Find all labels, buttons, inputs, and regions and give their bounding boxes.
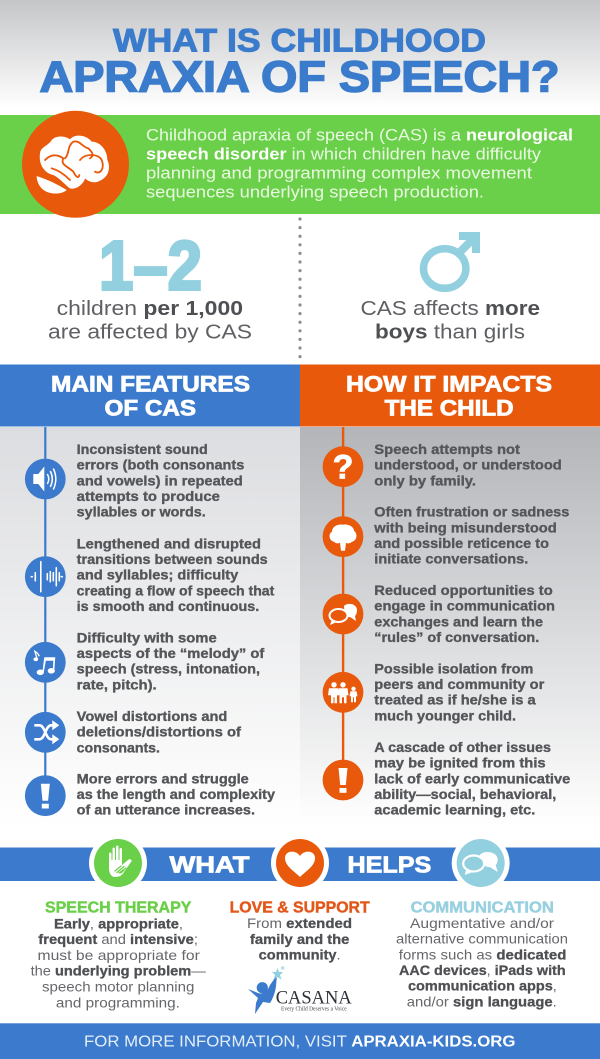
feature text 3: speech (stress, intonation, xyxy=(77,661,260,677)
column: communication xyxy=(396,899,568,1010)
icon: helping hands xyxy=(94,839,142,887)
stat: 1-2 children per 1,000: children per 1,000 xyxy=(57,298,243,320)
icon: question mark xyxy=(323,446,363,487)
title: APRAXIA OF SPEECH? xyxy=(40,54,560,102)
column: speech therapy xyxy=(31,899,206,1010)
impact text 2: Often frustration or sadness xyxy=(374,504,570,520)
panel: how it impacts the child xyxy=(300,364,600,827)
banner text: WHAT xyxy=(170,852,250,878)
logo: CASANA: Every Child Deserves a Voice xyxy=(281,1006,347,1013)
feature text 5: of an utterance increases. xyxy=(77,802,255,818)
feature text 3: aspects of the “melody” of xyxy=(77,645,265,661)
icon: heart xyxy=(276,839,324,887)
feature text 2: Lengthened and disrupted xyxy=(77,535,261,551)
feature text 4 xyxy=(77,708,241,755)
column: communication: AAC devices, iPads with xyxy=(399,962,566,978)
column: speech therapy: frequent and intensive; xyxy=(38,931,198,947)
icon: family group xyxy=(323,672,363,713)
feature text 2: is smooth and continuous. xyxy=(77,598,259,614)
impact text 3: Reduced opportunities to xyxy=(374,582,553,598)
banner text: HELPS xyxy=(348,852,431,878)
impact text 3: exchanges and learn the xyxy=(374,613,543,629)
feature text 1: syllables or words. xyxy=(77,504,206,520)
impact text 2: initiate conversations. xyxy=(374,551,528,567)
column: communication: communication apps , xyxy=(408,978,557,994)
icon: speech bubbles xyxy=(323,594,363,634)
impact text 5: academic learning, etc. xyxy=(374,802,535,818)
icon: question mark: ? xyxy=(333,449,353,487)
feature text 1 xyxy=(77,441,245,520)
column: communication: alternative communication xyxy=(396,931,568,947)
divider: dotted line xyxy=(298,219,302,360)
icon: brain xyxy=(22,111,129,218)
feature text 5: More errors and struggle xyxy=(77,770,249,786)
impact text 2: and possible reticence to xyxy=(374,535,549,551)
icon: exclamation mark xyxy=(323,760,363,800)
definition text: Childhood apraxia of speech (CAS) is a neurological xyxy=(146,127,573,145)
feature text 3: rate, pitch). xyxy=(77,676,157,692)
column: communication: COMMUNICATION xyxy=(411,899,554,916)
impact text 5: ability—social, behavioral, xyxy=(374,786,556,802)
impact text 4: much younger child. xyxy=(374,708,516,724)
title xyxy=(40,23,560,102)
heading: how it impacts: THE CHILD xyxy=(385,396,514,421)
timeline line xyxy=(342,427,344,767)
heading: how it impacts xyxy=(300,364,600,426)
impact text 1: Speech attempts not xyxy=(374,441,520,457)
feature text 2: creating a flow of speech that xyxy=(77,582,275,598)
column: speech therapy: speech motor planning xyxy=(42,978,194,994)
column: love and support: community. xyxy=(259,946,341,962)
column: speech therapy: the underlying problem — xyxy=(31,962,206,978)
column: love and support: From extended xyxy=(247,915,352,931)
feature text 3 xyxy=(77,629,265,692)
panel: definition xyxy=(0,111,600,218)
impact text 1: only by family. xyxy=(374,472,476,488)
column: communication: Augmentative and/or xyxy=(410,915,554,931)
impact text 3 xyxy=(374,582,555,645)
heading: main features: OF CAS xyxy=(104,396,196,421)
column: speech therapy: SPEECH THERAPY xyxy=(45,899,192,916)
feature text 2 xyxy=(77,535,275,614)
title: WHAT IS CHILDHOOD xyxy=(113,23,486,59)
column: love and support: family and the xyxy=(250,931,350,947)
panel: main features of CAS xyxy=(0,364,300,827)
definition text: speech disorder in which children have difficulty xyxy=(146,146,542,164)
icon: tree-shaped head xyxy=(323,516,363,557)
impact text 1: understood, or understood xyxy=(374,457,562,473)
stat: more boys than girls: CAS affects more xyxy=(360,298,540,320)
logo: CASANA xyxy=(248,966,352,1014)
icon: speech bubbles xyxy=(457,839,505,887)
footer xyxy=(0,1023,600,1059)
impact text 2: with being misunderstood xyxy=(373,519,557,535)
icon: music notes xyxy=(25,642,66,683)
impact text 2 xyxy=(373,504,570,567)
feature text 1: Inconsistent sound xyxy=(77,441,208,457)
heading: main features xyxy=(0,364,300,426)
stat: more boys than girls xyxy=(360,232,540,344)
impact text 5 xyxy=(374,739,571,818)
logo: CASANA: CASANA xyxy=(276,988,352,1008)
feature text 3: Difficulty with some xyxy=(77,629,217,645)
column: communication: and/or sign language . xyxy=(407,994,557,1010)
feature text 5 xyxy=(77,770,275,818)
feature text 2: transitions between sounds xyxy=(77,551,268,567)
column: communication: forms such as dedicated xyxy=(399,946,566,962)
icon: child reaching for star xyxy=(248,975,277,1014)
feature text 1: attempts to produce xyxy=(77,488,220,504)
heading: main features: MAIN FEATURES xyxy=(51,372,250,397)
banner text xyxy=(170,852,431,878)
impact text 3: “rules” of conversation. xyxy=(374,629,539,645)
banner: what helps xyxy=(0,834,600,892)
feature text 5: as the length and complexity xyxy=(77,786,275,802)
stat: 1-2 children per 1,000 xyxy=(48,226,252,344)
icon: shuffle arrows xyxy=(25,712,66,753)
definition text: sequences underlying speech production. xyxy=(146,183,484,201)
stat: 1-2 children per 1,000: are affected by CAS xyxy=(48,322,252,344)
feature text 4: consonants. xyxy=(77,739,160,755)
icon: exclamation mark xyxy=(25,775,66,816)
timeline line xyxy=(44,427,46,777)
column: speech therapy: Early, appropriate , xyxy=(54,915,183,931)
icon: male symbol xyxy=(424,232,480,288)
impact text 5: may be ignited from this xyxy=(374,755,546,771)
definition text xyxy=(146,127,573,201)
impact text 4: peers and community or xyxy=(374,676,545,692)
feature text 2: and syllables; difficulty xyxy=(77,567,239,583)
feature text 4: deletions/distortions of xyxy=(77,724,241,740)
heading: how it impacts: HOW IT IMPACTS xyxy=(346,372,552,397)
column: love and support: LOVE & SUPPORT xyxy=(230,899,370,916)
column: love and support xyxy=(230,899,370,962)
impact text 4 xyxy=(374,661,545,724)
impact text 5: A cascade of other issues xyxy=(374,739,551,755)
footer: FOR MORE INFORMATION, VISIT APRAXIA-KIDS.ORG xyxy=(84,1034,516,1051)
icon: sound wave xyxy=(25,556,66,597)
impact text 5: lack of early communicative xyxy=(374,770,571,786)
stat: 1-2 children per 1,000: 1–2 xyxy=(99,226,202,304)
column: speech therapy: and programming. xyxy=(56,994,180,1010)
column: speech therapy: must be appropriate for xyxy=(38,947,200,963)
impact text 4: Possible isolation from xyxy=(374,661,533,677)
impact text 1 xyxy=(374,441,562,488)
feature text 1: errors (both consonants xyxy=(77,457,245,473)
feature text 4: Vowel distortions and xyxy=(77,708,227,724)
icon: speaker xyxy=(25,459,66,499)
stat: more boys than girls: boys than girls xyxy=(375,322,525,344)
definition text: planning and programming complex movement xyxy=(146,164,532,182)
impact text 3: engage in communication xyxy=(374,598,555,614)
feature text 1: and vowels) in repeated xyxy=(77,472,243,488)
impact text 4: treated as if he/she is a xyxy=(374,692,536,708)
